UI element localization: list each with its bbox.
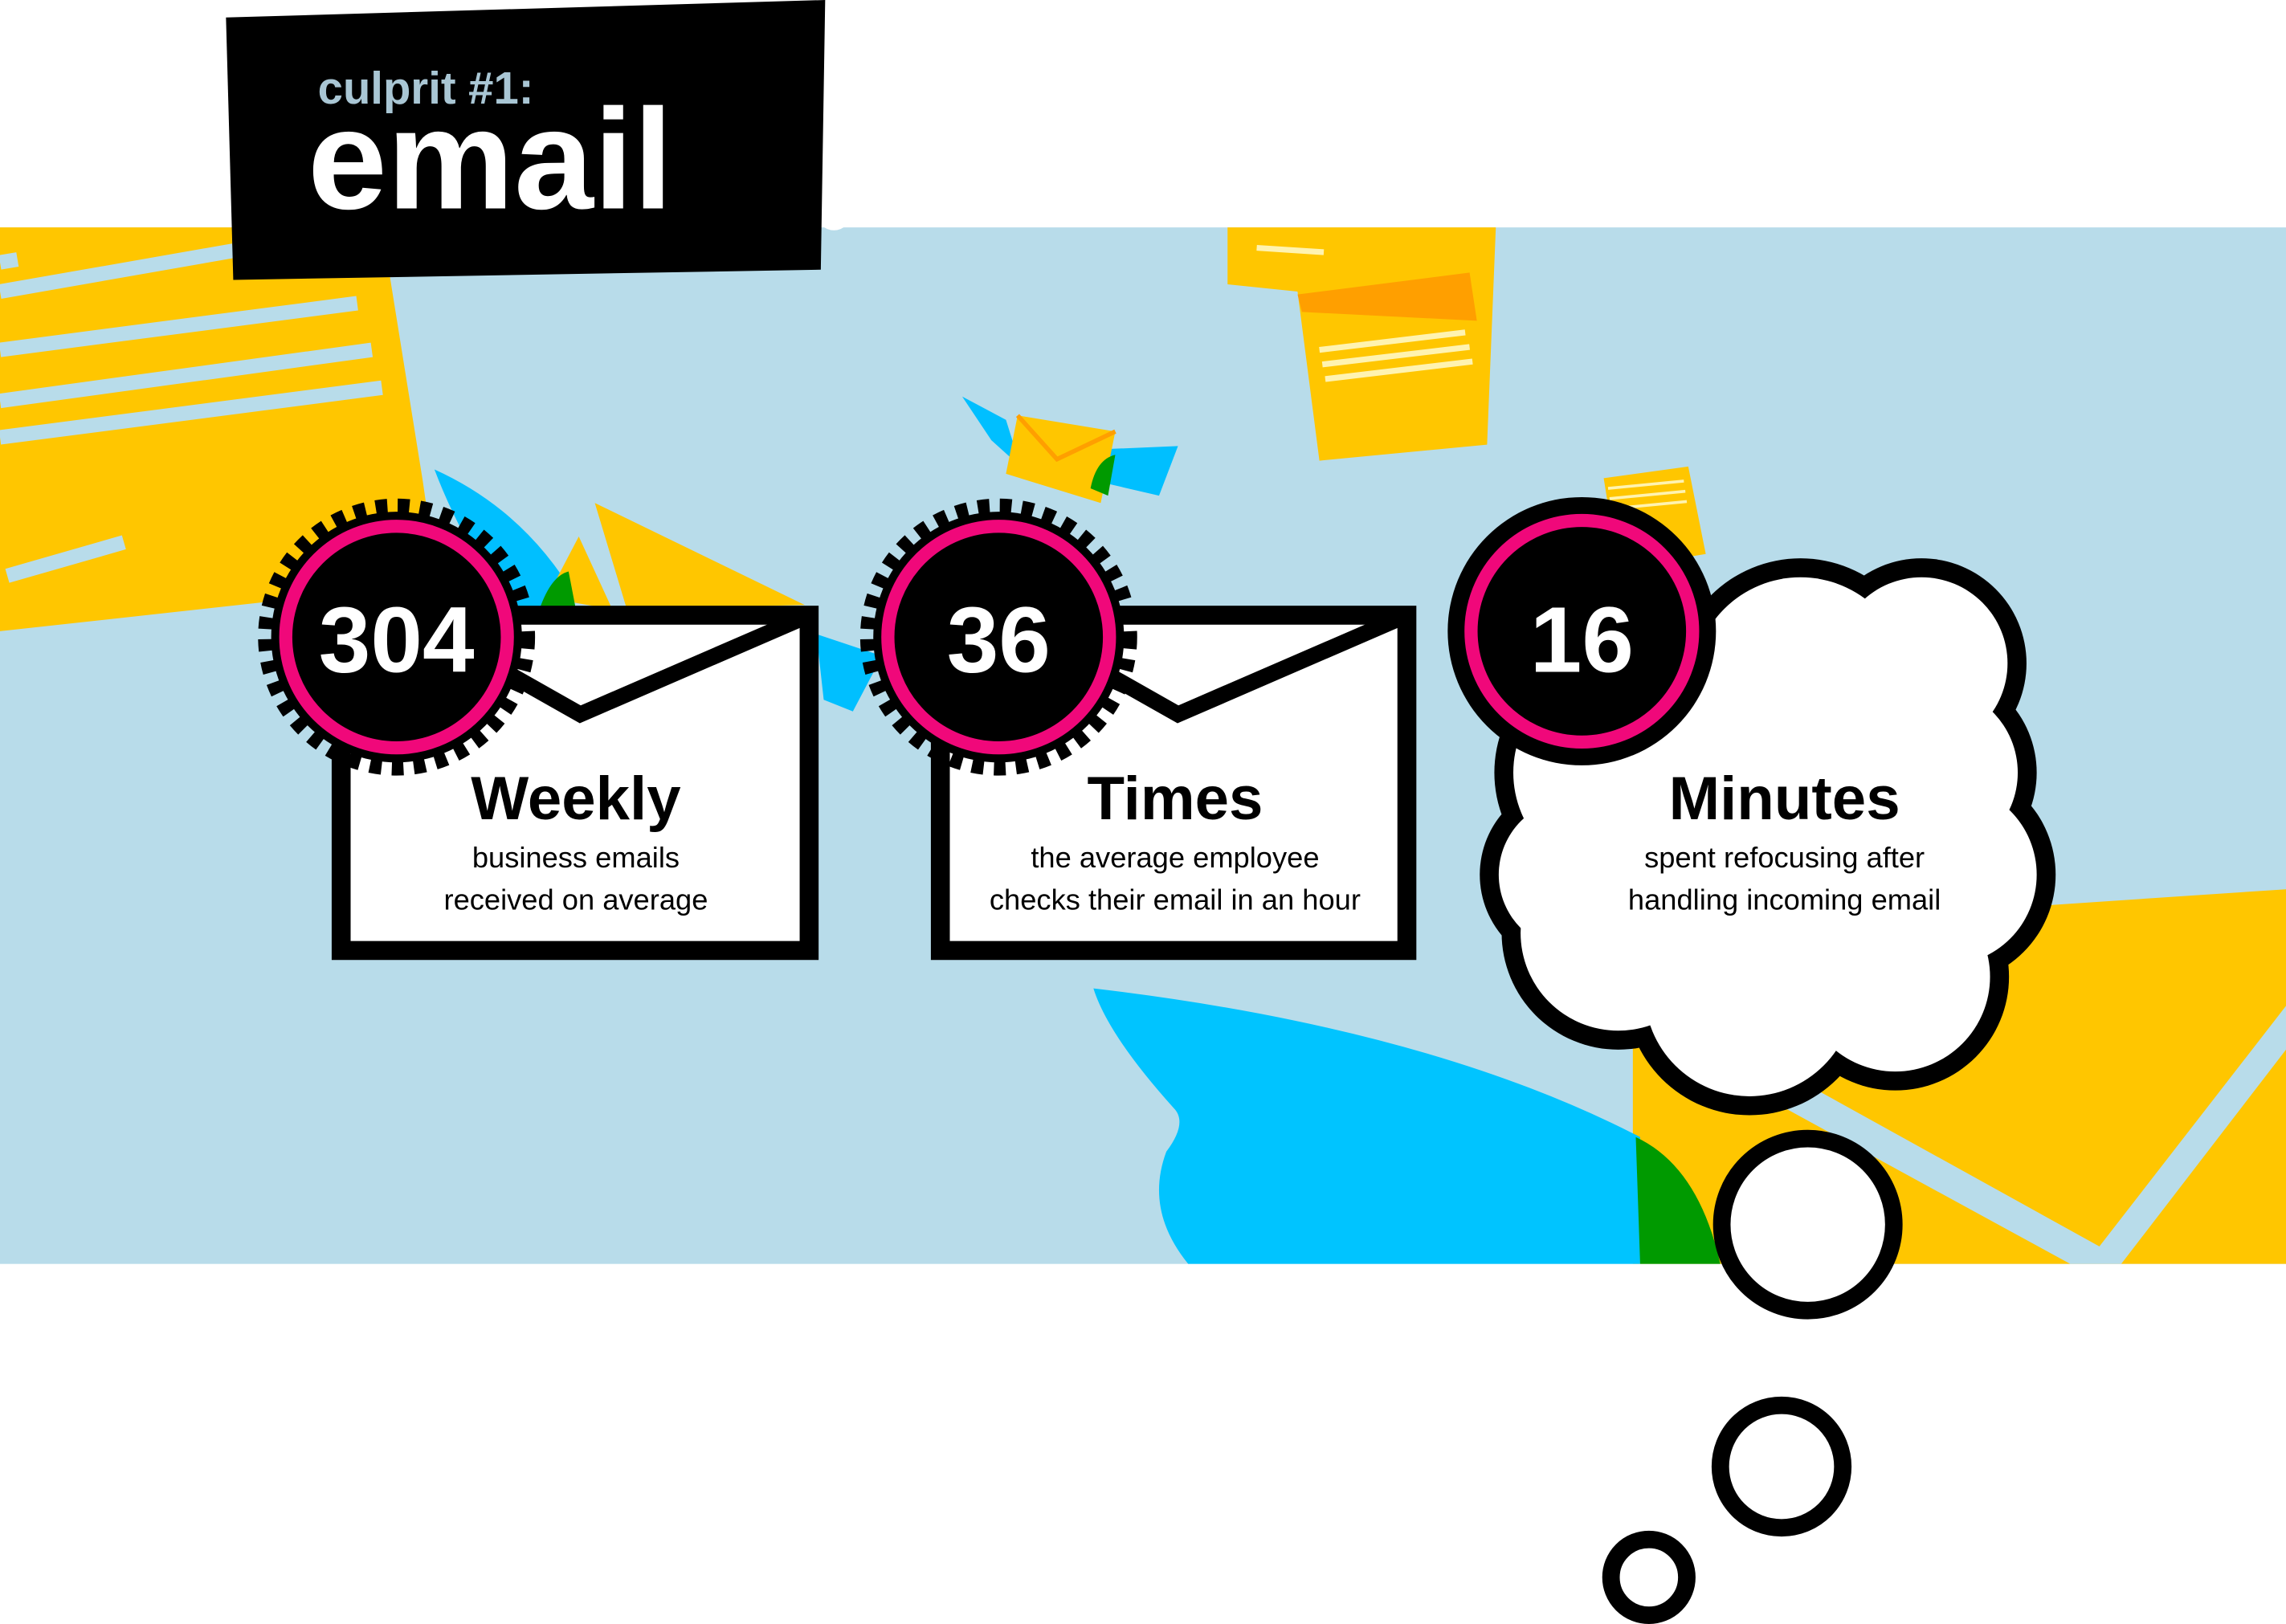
- envelope 1: [341, 615, 809, 950]
- text: spent refocusing: [1628, 841, 1941, 916]
- panel: weekly emails: [267, 508, 809, 950]
- badge: 16: [1447, 497, 1716, 765]
- paper: top middle yellow document: [1227, 227, 1496, 461]
- text: business emails: [443, 841, 708, 916]
- heading: Weekly: Weekly: [471, 765, 681, 833]
- panel: minutes refocusing cloud: [1447, 497, 2055, 1116]
- title box: [223, 0, 851, 280]
- paper: left yellow document: [0, 227, 438, 631]
- decoration: large wing and envelope bottom right: [1093, 889, 2286, 1264]
- paper: small yellow note: [1604, 467, 1706, 569]
- envelope 2: [941, 615, 1407, 950]
- title: email: email: [308, 80, 673, 239]
- title: culprit #1: culprit #1:: [318, 63, 533, 113]
- badge: 16: 16: [1530, 588, 1634, 692]
- badge: 304: 304: [319, 588, 475, 692]
- thought cloud: [1480, 558, 2055, 1116]
- text: spent refocusing: handling incoming email: [1628, 883, 1941, 916]
- text: average employee: the average employee: [1031, 841, 1320, 874]
- text: spent refocusing: spent refocusing after: [1644, 841, 1925, 874]
- heading: Minutes: Minutes: [1669, 765, 1900, 833]
- badge: 36: 36: [947, 588, 1051, 692]
- text: average employee: checks their email in an hour: [990, 883, 1361, 916]
- decoration: wing and yellow behind envelope 1: [435, 469, 882, 712]
- thought bubbles: [1611, 1139, 1894, 1615]
- text: business emails: business emails: [472, 841, 680, 874]
- text: average employee: [990, 841, 1361, 916]
- icon: flying envelope: [962, 397, 1178, 503]
- panel: times per hour: [869, 508, 1407, 950]
- text: business emails: received on average: [443, 883, 708, 916]
- background band: [0, 227, 2286, 1264]
- badge: 304: [267, 508, 526, 767]
- badge: 36: [869, 508, 1129, 767]
- heading: Times: Times: [1087, 765, 1263, 833]
